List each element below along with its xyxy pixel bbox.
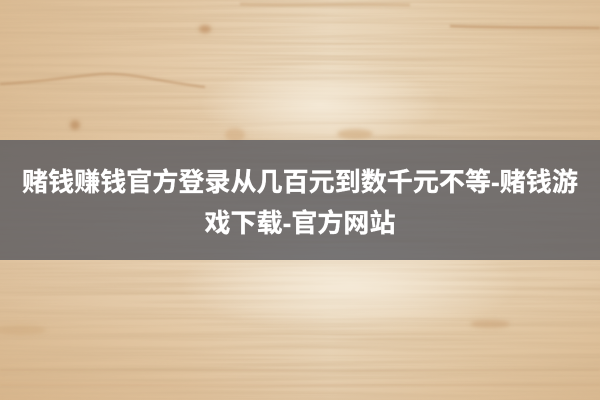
title band (0, 140, 600, 260)
title line 1: 赌钱赚钱官方登录从几百元到数千元不等-赌钱游 (22, 167, 578, 197)
title line 2: 戏下载-官方网站 (204, 208, 396, 238)
